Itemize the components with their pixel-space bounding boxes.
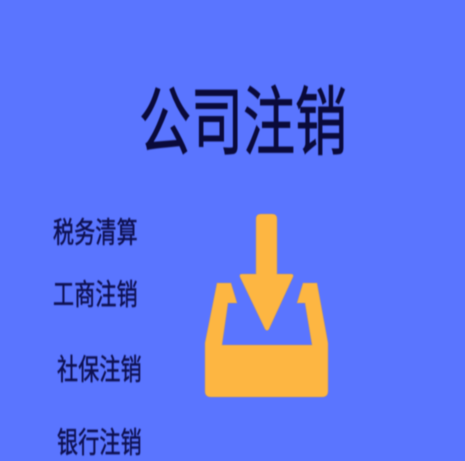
icon: arrow [240,214,293,330]
title: 公司注销 [139,82,347,166]
text: bank account closure: 银行注销 [57,428,142,459]
text: tax clearance: 税务清算 [53,218,138,249]
text: social insurance deregistration: 社保注销 [57,355,142,386]
icon: tray [205,283,328,397]
text: business deregistration: 工商注销 [53,280,138,311]
